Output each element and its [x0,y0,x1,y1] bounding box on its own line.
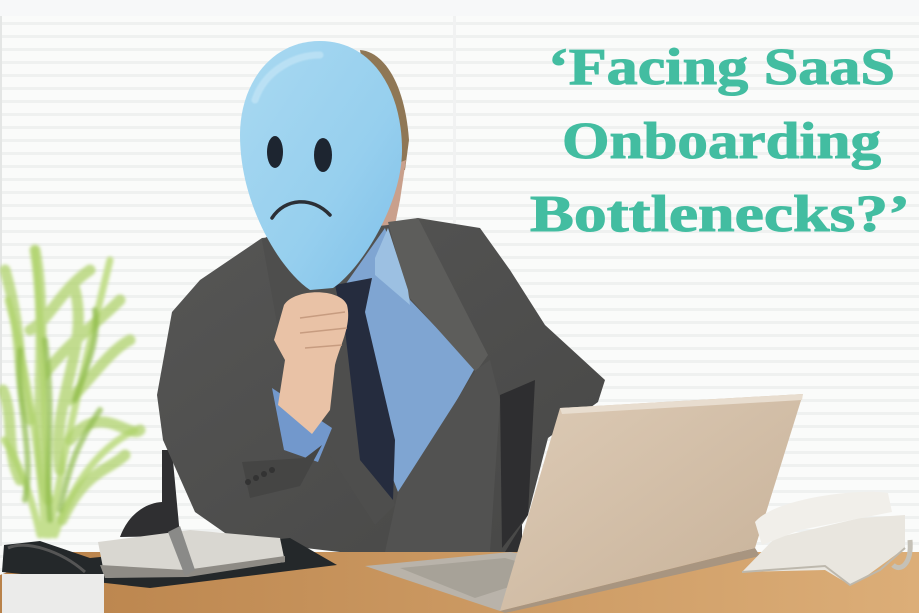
man: shirt [345,228,475,492]
balloon with sad face [240,41,402,290]
desk [0,552,919,613]
organizer [2,526,337,613]
man: lapels [262,218,500,552]
title line 2: Onboarding [562,113,881,170]
man: hair and neck [360,50,409,250]
balloon mouth [272,202,330,218]
title line 1: ‘Facing SaaS [548,39,895,96]
man: hand holding balloon [274,292,348,434]
title [530,39,910,243]
chair [120,380,522,552]
man: collar and tie [335,228,410,500]
title line 3: Bottlenecks?’ [530,186,910,243]
plant [3,250,140,535]
man: shirt cuff and sleeve [242,388,332,498]
man: suit jacket [157,218,605,552]
laptop [365,394,803,613]
telephone [742,492,910,585]
balloon eyes [267,136,332,172]
